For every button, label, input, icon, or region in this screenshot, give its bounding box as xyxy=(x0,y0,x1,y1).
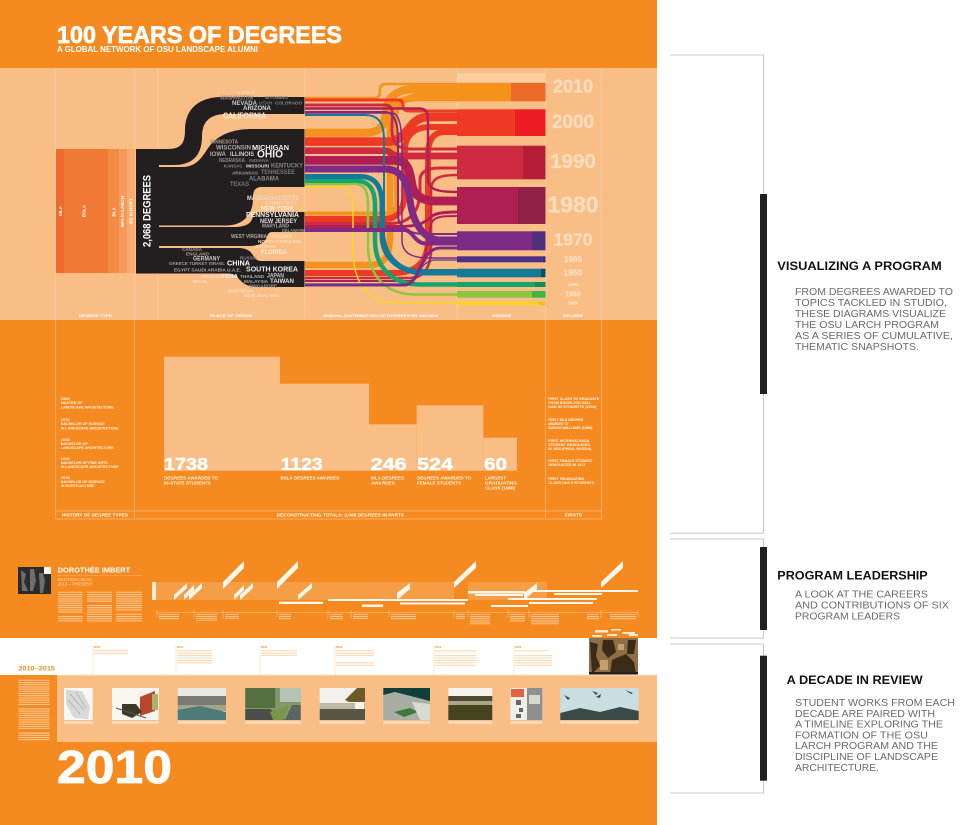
history of degree types list: 1938 xyxy=(61,438,70,442)
place of origin state and country labels: PENNSYLVANIA xyxy=(246,210,300,219)
thumbnail 1 xyxy=(64,688,93,724)
place of origin state and country labels: TAIWAN xyxy=(270,278,294,285)
annual distribution colored streams xyxy=(305,84,457,303)
place of origin state and country labels: UTAH xyxy=(259,100,272,106)
history of degree types list: BACHELOR OF SCIENCE xyxy=(61,422,105,426)
panel: program leadership xyxy=(18,561,638,625)
career timeline xyxy=(152,561,638,625)
callout: program leadership: PROGRAM LEADERS xyxy=(795,611,900,622)
place of origin state and country labels: MALAYSIA xyxy=(244,279,269,284)
thumbnail 2 xyxy=(112,688,159,724)
biography text columns xyxy=(58,591,142,622)
place of origin state and country labels: RUSSIA xyxy=(240,256,258,260)
place of origin state and country labels: GERMANY xyxy=(193,256,220,262)
history of degree types list: BACHELOR OF xyxy=(61,442,88,446)
history of degree types list: LANDSCAPE ARCHITECTURE xyxy=(61,446,114,450)
place of origin state and country labels: CONNECTICUT xyxy=(265,200,297,206)
history of degree types list: 1926 xyxy=(61,457,70,461)
archival photo xyxy=(589,629,638,675)
place of origin state and country labels: FLORIDA xyxy=(261,250,288,256)
callout: visualizing a program: VISUALIZING A PROGRAM xyxy=(777,259,942,273)
place of origin state and country labels: WYOMING xyxy=(265,95,289,100)
poster background xyxy=(0,0,657,825)
thumbnail 5 xyxy=(320,688,365,724)
leader name and role xyxy=(58,566,142,586)
decade labels: 1990 xyxy=(550,150,596,173)
decade labels: 1980 xyxy=(547,192,599,218)
place of origin state and country labels: THAILAND xyxy=(240,274,265,279)
decade labels: 1930 xyxy=(565,292,581,299)
totals captions: LARGEST xyxy=(485,475,506,480)
degree type stacked column: MLA xyxy=(58,205,63,216)
decade labels xyxy=(547,77,599,306)
place of origin state and country labels: MARYLAND xyxy=(262,224,289,230)
student work thumbnails xyxy=(64,688,639,724)
callout: a decade in review: ARCHITECTURE. xyxy=(795,763,879,774)
totals numbers: 246 xyxy=(371,454,407,474)
totals numbers: 524 xyxy=(417,454,453,474)
totals captions: CLASS (1980) xyxy=(485,485,516,490)
callout: visualizing a program: THE OSU LARCH PROGRAM xyxy=(795,320,939,331)
place of origin state and country labels: NEBRASKA xyxy=(219,158,245,164)
history of degree types list: LANDSCAPE ARCHITECTURE xyxy=(61,405,114,409)
firsts list: FIRST INTERNATIONAL xyxy=(548,439,591,443)
place of origin state and country labels: NEW JERSEY xyxy=(260,218,298,225)
place of origin state and country labels: INDIA xyxy=(221,274,238,280)
place of origin state and country labels: DELAWARE xyxy=(282,228,305,233)
callout: a decade in review xyxy=(670,644,955,793)
callout: visualizing a program: THESE DIAGRAMS VISUALIZE xyxy=(795,309,946,320)
place of origin state and country labels: ARKANSAS xyxy=(232,170,258,176)
decade range heading: 2010–2015 xyxy=(18,666,55,673)
firsts list: IN 1918 (FINDA, RUSSIA) xyxy=(548,447,592,451)
leader name and role: 2013 – PRESENT xyxy=(58,581,93,586)
column captions: PLACE OF ORIGIN xyxy=(210,314,252,318)
callout: a decade in review: DECADE ARE PAIRED WITH xyxy=(795,709,935,720)
column captions: DEGREE TYPE xyxy=(79,314,113,318)
history of degree types list: 1970 xyxy=(61,418,70,422)
firsts list: STUDENT GRADUATED xyxy=(548,443,591,447)
place of origin state and country labels: MASSACHUSETTS xyxy=(247,195,300,202)
place of origin state and country labels: SOUTH KOREA xyxy=(246,264,299,274)
firsts list: FIRST FEMALE STUDENT xyxy=(548,459,593,463)
totals captions: DEGREES AWARDED TO xyxy=(164,475,219,480)
place of origin state and country labels: BRAZIL xyxy=(193,279,208,284)
column captions: GENDER xyxy=(492,314,511,318)
place of origin state and country labels: CHINA xyxy=(227,260,250,268)
place of origin state and country labels: CALIFORNIA xyxy=(223,112,266,120)
timeline year entries xyxy=(94,645,552,667)
title block xyxy=(57,22,342,54)
panel: degree flow diagram xyxy=(0,68,657,320)
place of origin state and country labels: WEST VIRGINIA xyxy=(231,234,267,240)
firsts list: GRADUATED IN 1917 xyxy=(548,463,585,467)
totals captions: DEGREES AWARDED TO xyxy=(417,475,472,480)
history of degree types list: IN LANDSCAPE ARCHITECTURE xyxy=(61,426,119,430)
totals numbers: 60 xyxy=(484,454,507,474)
section footers: FIRSTS xyxy=(565,512,582,518)
place of origin state and country labels xyxy=(169,90,305,298)
section footers: DECONSTRUCTING TOTALS: 2,068 DEGREES IN PARTS xyxy=(277,512,404,518)
timeline year entries: 2014 xyxy=(435,645,442,649)
place of origin state and country labels: MEXICO xyxy=(201,274,221,279)
firsts list xyxy=(548,397,600,485)
callout: program leadership: A LOOK AT THE CAREERS xyxy=(795,590,928,601)
firsts list: FIRST CLASS TO GRADUATE xyxy=(548,397,600,401)
place of origin state and country labels: COLORADO xyxy=(275,100,303,106)
place of origin black ribbons xyxy=(136,97,304,287)
history of degree types list: IN LANDSCAPE ARCHITECTURE xyxy=(61,465,119,469)
place of origin state and country labels: NEW YORK xyxy=(261,206,294,212)
history of degree types list: 1980 xyxy=(61,397,70,401)
callout: visualizing a program: TOPICS TACKLED IN STUDIO, xyxy=(795,298,947,309)
totals captions: AWARDED xyxy=(371,480,395,485)
decade labels: 1970 xyxy=(554,230,593,250)
section footers xyxy=(62,512,582,518)
thumbnail 7 xyxy=(448,688,492,724)
place of origin state and country labels: JAPAN xyxy=(267,274,284,280)
place of origin state and country labels: WISCONSIN xyxy=(216,146,251,152)
place of origin state and country labels: GEORGIA xyxy=(255,244,277,249)
panel: decade timeline strip xyxy=(0,629,657,675)
totals captions: BSLA DEGREES AWARDED xyxy=(280,475,340,480)
firsts list: HAD 52 STUDENTS (2004) xyxy=(548,405,597,409)
column captions: ANNUAL DISTRIBUTION OF DEGREES BY REGION xyxy=(323,314,438,318)
place of origin state and country labels: SINGAPORE xyxy=(249,284,277,288)
panel: student works band xyxy=(18,674,657,742)
totals captions xyxy=(164,475,518,490)
place of origin state and country labels: INDONESIA xyxy=(228,288,255,294)
thumbnail 8 xyxy=(510,688,542,724)
callout: a decade in review: A DECADE IN REVIEW xyxy=(787,673,923,687)
place of origin state and country labels: NORTH CAROLINA xyxy=(258,239,302,244)
callout: a decade in review: STUDENT WORKS FROM EACH xyxy=(795,698,955,709)
callout: program leadership: PROGRAM LEADERSHIP xyxy=(777,568,928,582)
stepped bar chart xyxy=(164,357,517,471)
degree type stacked column xyxy=(56,149,135,273)
decade labels: 1940 xyxy=(568,282,579,287)
place of origin state and country labels: MICHIGAN xyxy=(252,143,289,152)
degree type stacked column: BLA xyxy=(112,207,116,217)
place of origin state and country labels: VIRGINIA xyxy=(270,234,292,240)
firsts list: AWARDED TO xyxy=(548,422,568,426)
place of origin state and country labels: WASHINGTON xyxy=(220,95,253,101)
section footers: HISTORY OF DEGREE TYPES xyxy=(62,512,128,518)
leader name and role: SECTION HEAD xyxy=(58,577,92,582)
firsts list: FIRST MLA DEGREE xyxy=(548,418,584,422)
decade labels: 2000 xyxy=(552,112,594,133)
timeline year entries: 2015 xyxy=(515,645,522,649)
place of origin state and country labels: TEXAS xyxy=(230,182,249,188)
callout: program leadership: AND CONTRIBUTIONS OF SIX xyxy=(795,600,949,612)
callout: visualizing a program: THEMATIC SNAPSHOTS. xyxy=(795,342,919,353)
thumbnail 4 xyxy=(245,688,301,724)
degree type stacked column: BS in HORT xyxy=(128,198,134,224)
place of origin state and country labels: MINNESOTA xyxy=(210,140,238,146)
place of origin state and country labels: ALABAMA xyxy=(249,176,280,182)
history of degree types list xyxy=(61,397,119,488)
callout: a decade in review: FORMATION OF THE OSU xyxy=(795,730,928,741)
timeline year entries: 2010 xyxy=(94,645,101,649)
panel: deconstructing totals xyxy=(56,320,602,519)
degree type stacked column: BSLA xyxy=(82,204,86,217)
thumbnail 9 xyxy=(560,688,639,724)
total degrees label: 2,068 DEGREES xyxy=(142,175,154,247)
history of degree types list: BACHELOR OF FINE ARTS xyxy=(61,461,108,465)
place of origin state and country labels: IOWA xyxy=(210,152,227,158)
decade labels: 1920 xyxy=(568,301,579,306)
totals captions: FEMALE STUDENTS xyxy=(417,480,461,485)
decade labels: 2010 xyxy=(553,77,593,97)
place of origin state and country labels: INDIANA xyxy=(249,158,270,163)
firsts list: SARAH WILLIAMS (1980) xyxy=(548,426,593,430)
callout: a decade in review: LARCH PROGRAM AND THE xyxy=(795,741,938,752)
timeline year entries: 2012 xyxy=(261,645,268,649)
place of origin state and country labels: TENNESSEE xyxy=(261,169,296,176)
decade intro text xyxy=(18,679,50,741)
place of origin state and country labels: CANADA xyxy=(182,247,203,252)
place of origin state and country labels: KANSAS xyxy=(224,164,242,168)
firsts list: FIRST GRADUATING xyxy=(548,477,584,481)
subtitle: A GLOBAL NETWORK OF OSU LANDSCAPE ALUMNI xyxy=(57,44,258,54)
place of origin state and country labels: ILLINOIS xyxy=(230,152,254,158)
callout: visualizing a program: AS A SERIES OF CUMULATIVE, xyxy=(795,331,953,342)
big decade label: 2010 xyxy=(57,741,172,793)
title: 100 YEARS OF DEGREES xyxy=(57,22,342,49)
thumbnail 3 xyxy=(178,688,226,724)
history of degree types list: MASTER OF xyxy=(61,401,83,405)
thumbnail 6 xyxy=(383,688,430,724)
place of origin state and country labels: ALASKA xyxy=(236,90,256,95)
degree type stacked column: BFA in LARCH xyxy=(120,196,125,227)
totals numbers: 1123 xyxy=(281,454,323,474)
timeline year entries: 2011 xyxy=(177,645,184,649)
callout: visualizing a program xyxy=(670,55,953,533)
totals numbers xyxy=(164,454,507,474)
column captions xyxy=(79,314,584,318)
totals numbers: 1738 xyxy=(164,454,208,474)
place of origin state and country labels: EGYPT SAUDI ARABIA U.A.E. xyxy=(174,268,241,272)
totals captions: IN-STATE STUDENTS xyxy=(164,480,211,485)
place of origin state and country labels: NEVADA xyxy=(232,100,257,107)
history of degree types list: IN HORTICULTURE xyxy=(61,484,95,488)
leader name and role: DOROTHÉE IMBERT xyxy=(58,566,130,575)
place of origin state and country labels: ARIZONA xyxy=(243,105,271,112)
callout: a decade in review: DISCIPLINE OF LANDSCAPE xyxy=(795,752,938,763)
timeline year entries: 2013 xyxy=(336,645,343,649)
place of origin state and country labels: ENGLAND xyxy=(186,252,210,256)
totals captions: MLA DEGREES xyxy=(371,475,404,480)
callout: visualizing a program: FROM DEGREES AWARDED TO xyxy=(795,287,953,298)
history of degree types list: 1918 xyxy=(61,476,70,480)
firsts list: CLASS HAD 5 STUDENTS xyxy=(548,481,595,485)
place of origin state and country labels: KENTUCKY xyxy=(271,164,303,170)
place of origin state and country labels: GREECE TURKEY ISRAEL xyxy=(169,261,225,266)
place of origin state and country labels: NEW ZEALAND xyxy=(244,293,280,298)
totals captions: GRADUATING xyxy=(485,480,518,485)
portrait photo xyxy=(18,567,51,594)
history of degree types list: BACHELOR OF SCIENCE xyxy=(61,480,105,484)
callout: program leadership xyxy=(670,539,949,638)
decade labels: 1960 xyxy=(564,255,582,264)
firsts list: FROM KNOWLTON HALL xyxy=(548,401,592,405)
callout: a decade in review: A TIMELINE EXPLORING THE xyxy=(795,720,943,730)
place of origin state and country labels: OHIO xyxy=(257,148,283,160)
gender split bars xyxy=(457,73,546,305)
decade labels: 1950 xyxy=(564,268,583,278)
place of origin state and country labels: MISSOURI xyxy=(246,164,269,168)
column captions: DECADE xyxy=(563,314,584,318)
